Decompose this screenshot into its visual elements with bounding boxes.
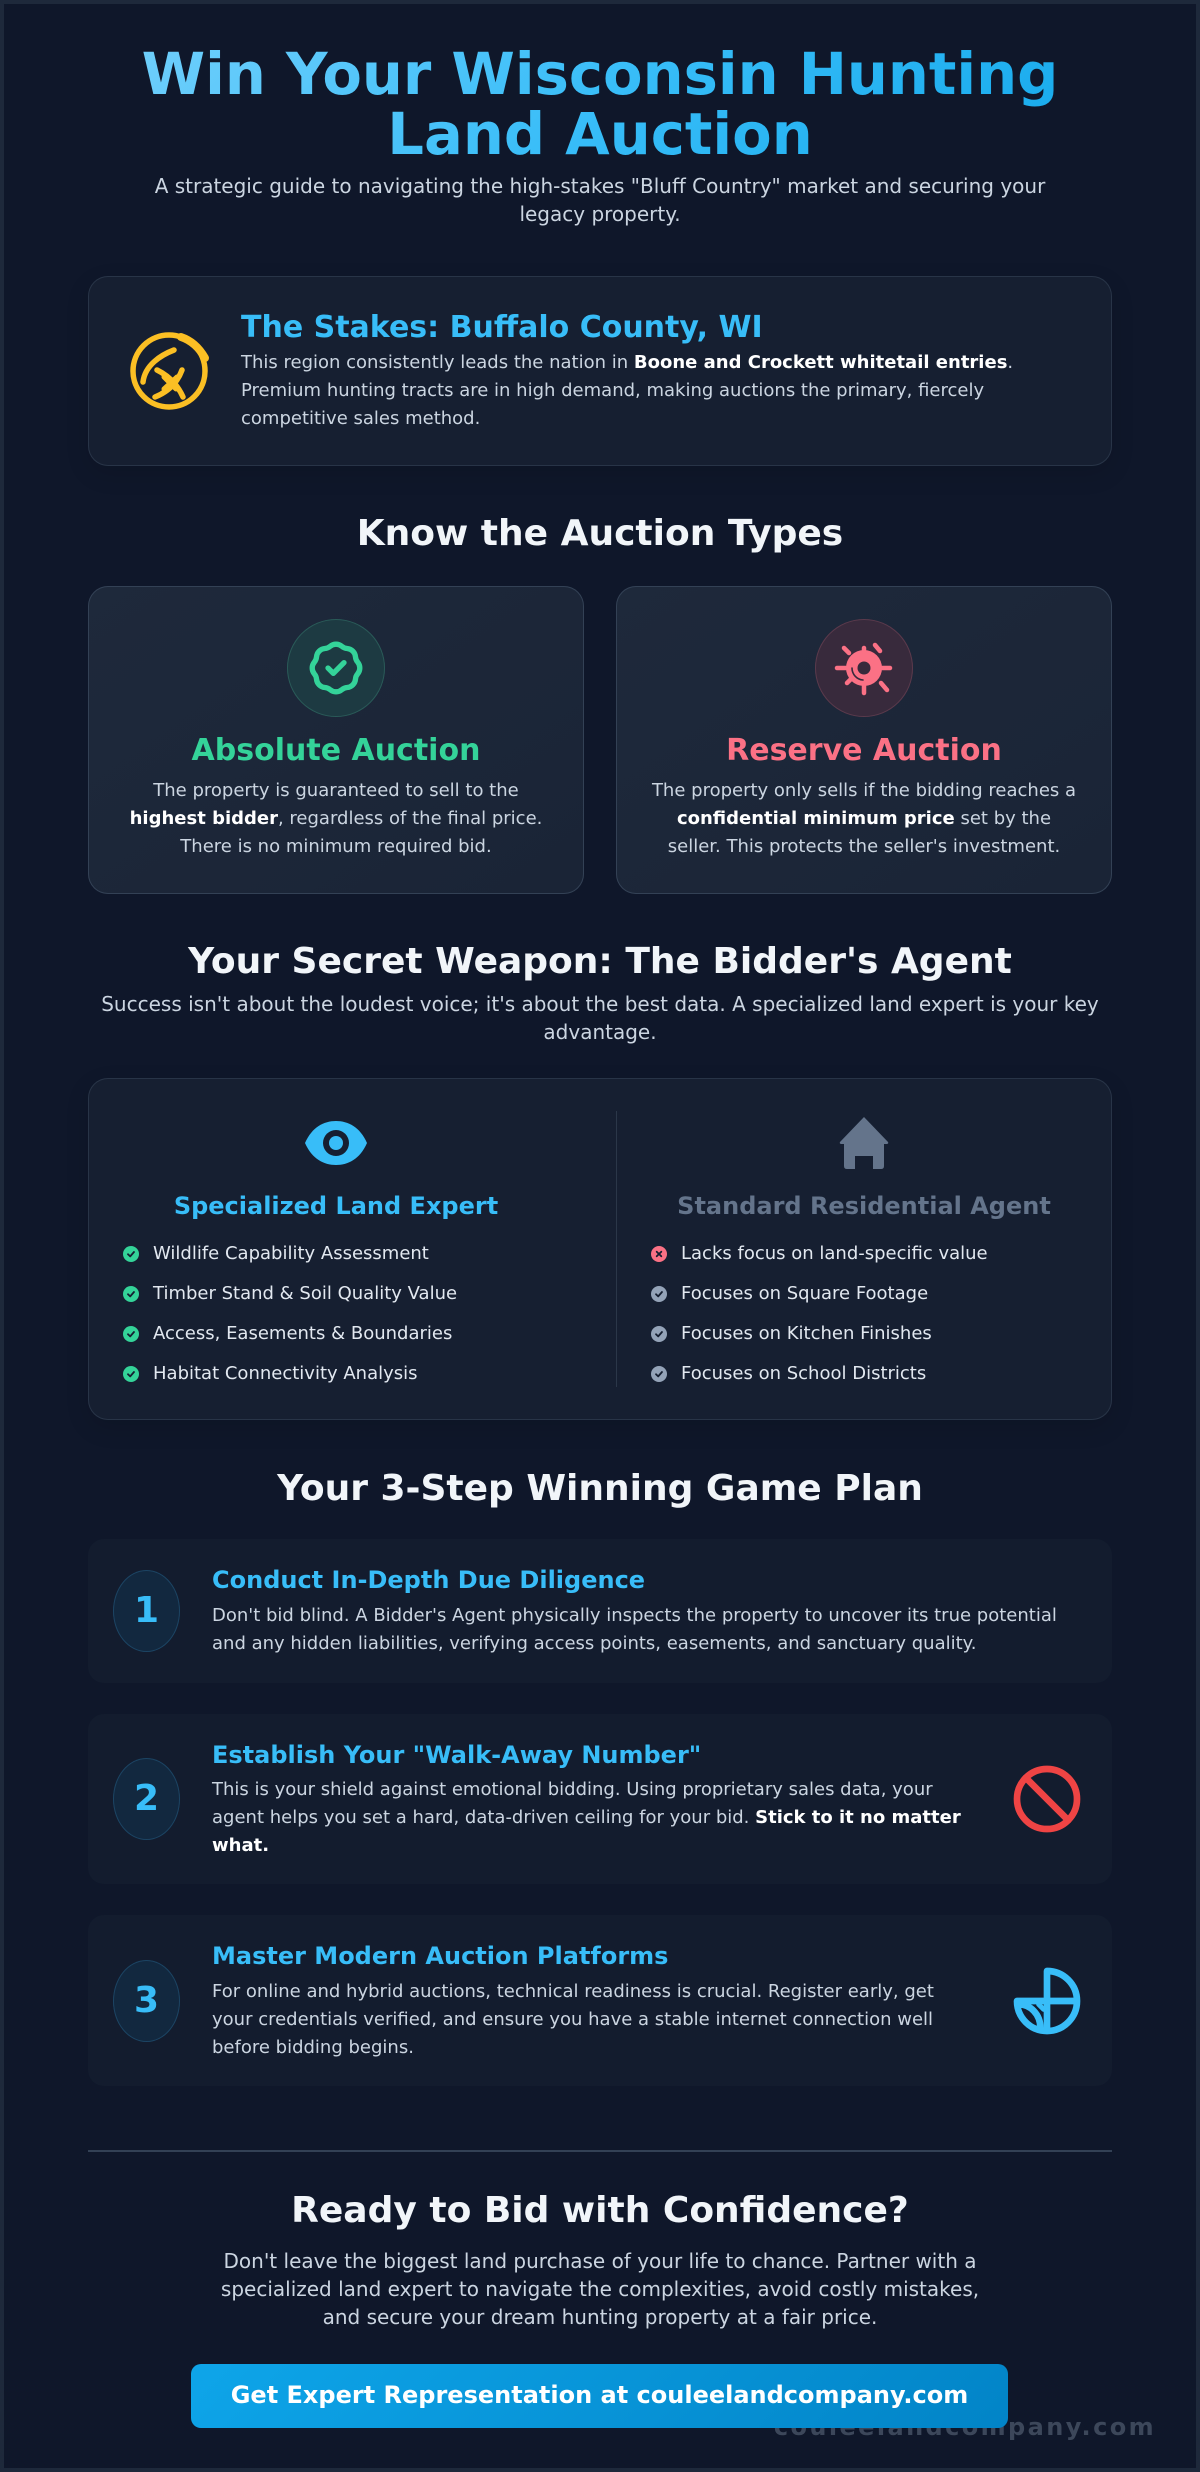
heading: auction types: Know the Auction Types (357, 513, 843, 554)
text: reserve auction (652, 780, 1076, 857)
subtitle: A strategic guide to navigating the high-stakes "Bluff Country" market and securing your (155, 174, 1045, 198)
item: Habitat Connectivity Analysis (153, 1363, 418, 1384)
heading: residential agent: Standard Residential Agent (677, 1192, 1051, 1220)
number badge 3 (113, 1960, 180, 2042)
panel: step 3 (88, 1915, 1112, 2086)
text: reserve auction: seller. This protects the seller's investment. (668, 836, 1060, 857)
subtitle (155, 174, 1046, 226)
step 3 text (212, 1981, 934, 2058)
step 1 text (212, 1605, 1057, 1654)
title (0, 45, 1200, 165)
text: the stakes: This region consistently leads the nation in Boone and Crockett whitetail entries. (241, 352, 1013, 373)
text: absolute auction: highest bidder, regardless of the final price. (130, 808, 542, 829)
heading: secret weapon: Your Secret Weapon: The Bidder's Agent (188, 941, 1012, 982)
icon: reserve target (815, 619, 913, 717)
text: absolute auction (130, 780, 542, 857)
list: residential agent (651, 1243, 988, 1384)
number badge 2 (113, 1758, 180, 1840)
step 1 title: Conduct In-Depth Due Diligence (212, 1566, 645, 1594)
text: the stakes: competitive sales method. (241, 408, 480, 429)
step 1 text: Don't bid blind. A Bidder's Agent physically inspects the property to uncover its true potential (212, 1605, 1057, 1626)
text: the stakes: Premium hunting tracts are in high demand, making auctions the primary, fiercely (241, 380, 984, 401)
watermark: couleelandcompany.com (774, 2413, 1156, 2441)
icon: eye (305, 1121, 367, 1165)
step 2 text: what. (212, 1835, 269, 1856)
item: Lacks focus on land-specific value (681, 1243, 988, 1264)
list: land expert (123, 1243, 457, 1384)
step 2 title: Establish Your "Walk-Away Number" (212, 1741, 701, 1769)
button: call to action: Get Expert Representation at couleelandcompany.com (231, 2381, 968, 2409)
number badge 1 (113, 1570, 180, 1652)
number badge 1: 1 (134, 1590, 159, 1631)
step 2 text: agent helps you set a hard, data-driven ceiling for your bid. Stick to it no matter (212, 1807, 961, 1828)
panel: agent comparison (88, 1078, 1112, 1420)
heading: the stakes: The Stakes: Buffalo County, WI (241, 310, 763, 345)
item: Timber Stand & Soil Quality Value (153, 1283, 457, 1304)
text: the stakes (240, 352, 1013, 429)
text: absolute auction: The property is guaranteed to sell to the (153, 780, 519, 801)
text: secret weapon intro (101, 992, 1099, 1044)
item: Wildlife Capability Assessment (153, 1243, 429, 1264)
step 2 text (212, 1779, 961, 1856)
text: ready to bid: Don't leave the biggest land purchase of your life to chance. Partner with a (224, 2249, 976, 2273)
panel: absolute auction (88, 586, 584, 894)
heading: absolute auction: Absolute Auction (192, 733, 480, 768)
step 3 title: Master Modern Auction Platforms (212, 1942, 668, 1970)
panel: the stakes (88, 276, 1112, 466)
heading: game plan: Your 3-Step Winning Game Plan (277, 1468, 923, 1509)
step 3 text: before bidding begins. (212, 2037, 414, 2058)
text: ready to bid: specialized land expert to navigate the complexities, avoid costly mistakes, (221, 2277, 979, 2301)
step 1 text: and any hidden liabilities, verifying access points, easements, and sanctuary quality. (212, 1633, 976, 1654)
icon: house (840, 1117, 888, 1169)
text: ready to bid (221, 2249, 979, 2329)
item: Access, Easements & Boundaries (153, 1323, 452, 1344)
icon: crossed tools in ring (130, 332, 209, 410)
number badge 2: 2 (134, 1778, 159, 1819)
text: absolute auction: There is no minimum required bid. (180, 836, 492, 857)
subtitle: legacy property. (519, 202, 681, 226)
heading: ready to bid: Ready to Bid with Confidence? (291, 2190, 909, 2231)
icon: prohibited (1014, 1766, 1080, 1832)
text: secret weapon intro: advantage. (543, 1020, 657, 1044)
step 2 text: This is your shield against emotional bidding. Using proprietary sales data, your (212, 1779, 933, 1800)
item: Focuses on School Districts (681, 1363, 926, 1384)
title: Land Auction (387, 101, 813, 168)
panel: step 2 (88, 1714, 1112, 1884)
item: Focuses on Square Footage (681, 1283, 928, 1304)
panel: reserve auction (616, 586, 1112, 894)
text: reserve auction: confidential minimum price set by the (677, 808, 1051, 829)
icon: badge check (287, 619, 385, 717)
button: call to action (191, 2364, 1008, 2428)
icon: quartered dial (1014, 1968, 1080, 2034)
panel: step 1 (88, 1539, 1112, 1683)
text: ready to bid: and secure your dream hunting property at a fair price. (323, 2305, 877, 2329)
heading: reserve auction: Reserve Auction (726, 733, 1002, 768)
text: secret weapon intro: Success isn't about the loudest voice; it's about the best data. A specialized land expert is your key (101, 992, 1099, 1016)
step 3 text: For online and hybrid auctions, technical readiness is crucial. Register early, get (212, 1981, 934, 2002)
title: Win Your Wisconsin Hunting (142, 41, 1058, 108)
step 3 text: your credentials verified, and ensure you have a stable internet connection well (212, 2009, 933, 2030)
heading: land expert: Specialized Land Expert (174, 1192, 498, 1220)
number badge 3: 3 (134, 1980, 159, 2021)
text: reserve auction: The property only sells if the bidding reaches a (652, 780, 1076, 801)
item: Focuses on Kitchen Finishes (681, 1323, 932, 1344)
